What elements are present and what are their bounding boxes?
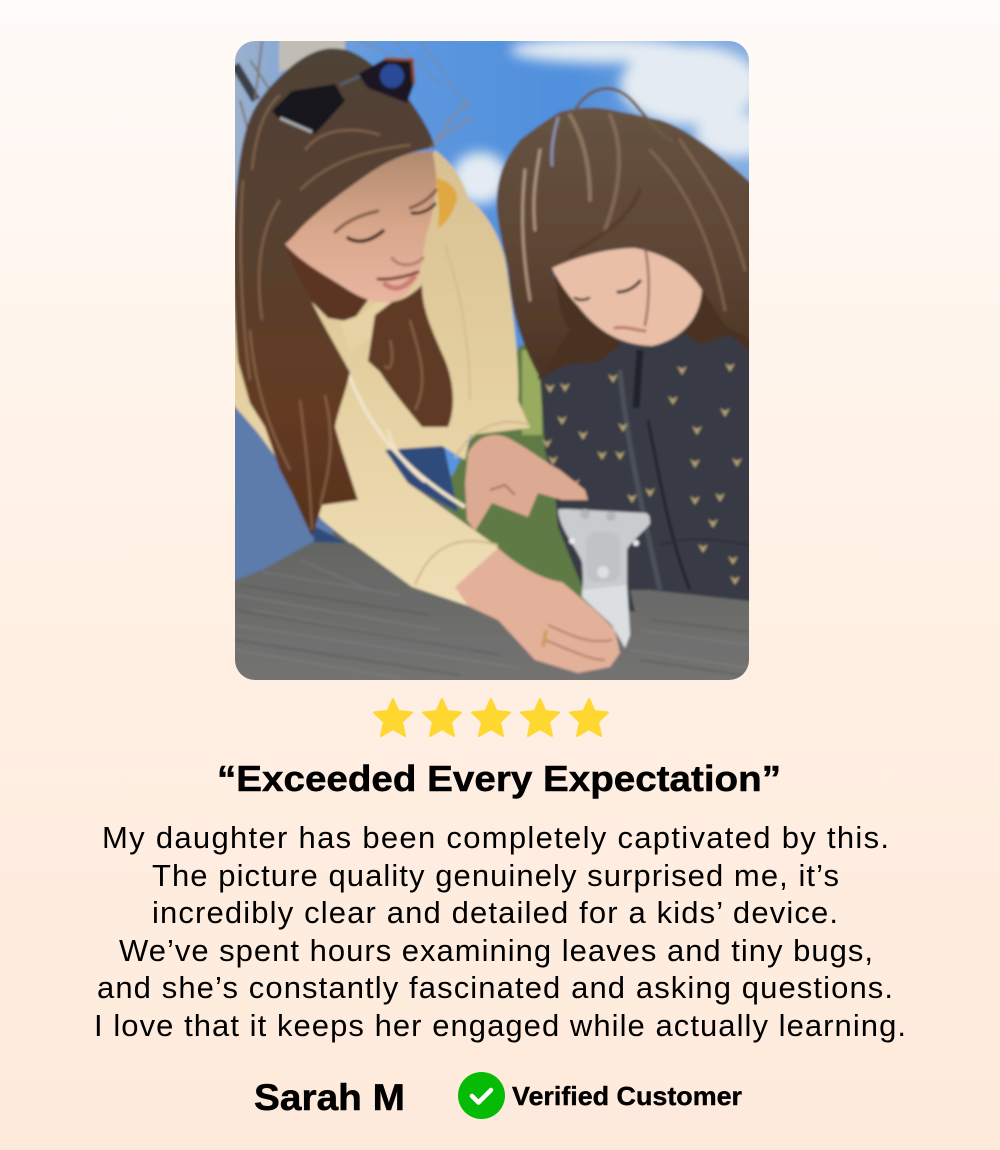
review body text [94,820,906,1043]
jacket heart pattern [542,363,742,585]
verified customer label: Verified Customer [512,1081,742,1111]
girl's back hair [536,274,749,380]
sky [225,31,759,476]
mother's pointing hand [465,435,588,531]
jacket zipper [620,350,749,590]
clouds [452,37,775,204]
photo base [330,474,598,613]
mother's hoodie [225,150,530,607]
girl's hair [497,108,759,378]
hoodie cuffs and drawstring [345,308,530,586]
review headline: “Exceeded Every Expectation” [217,758,781,799]
icon: verified check badge [458,1072,505,1119]
girl's face [552,248,702,346]
review body text: I love that it keeps her engaged while actually learning. [94,1008,906,1043]
mother's neck shadow [280,240,368,322]
sunglasses [272,59,414,134]
rating stars [374,699,608,736]
girl's eyes and mouth [575,281,645,331]
reviewer name: Sarah M [254,1077,405,1118]
girl's jacket [540,315,759,612]
review body text: My daughter has been completely captivated by this. [102,820,889,855]
mother's lower hand and arm [455,548,620,673]
photo: mother and daughter with device [225,31,775,691]
mother's eyes, nose and mouth [335,190,436,288]
mother's hair [234,48,435,537]
finger lines and ring [543,625,612,660]
mother's collar [343,304,386,324]
table wood grain [360,586,368,590]
girl's hair strands [523,88,745,325]
review body text: The picture quality genuinely surprised me, it’s [152,858,839,893]
mother's hair highlights [241,95,473,530]
light blue clothing at left [235,406,336,582]
table [225,542,759,690]
grass [447,343,582,598]
device [558,509,650,648]
dark jeans [385,436,458,512]
review body text: We’ve spent hours examining leaves and tiny bugs, [119,933,873,968]
mother's face [285,151,436,302]
background post and rail [235,36,470,130]
review body text: incredibly clear and detailed for a kids’ device. [152,895,838,930]
review body text: and she’s constantly fascinated and asking questions. [97,970,893,1005]
